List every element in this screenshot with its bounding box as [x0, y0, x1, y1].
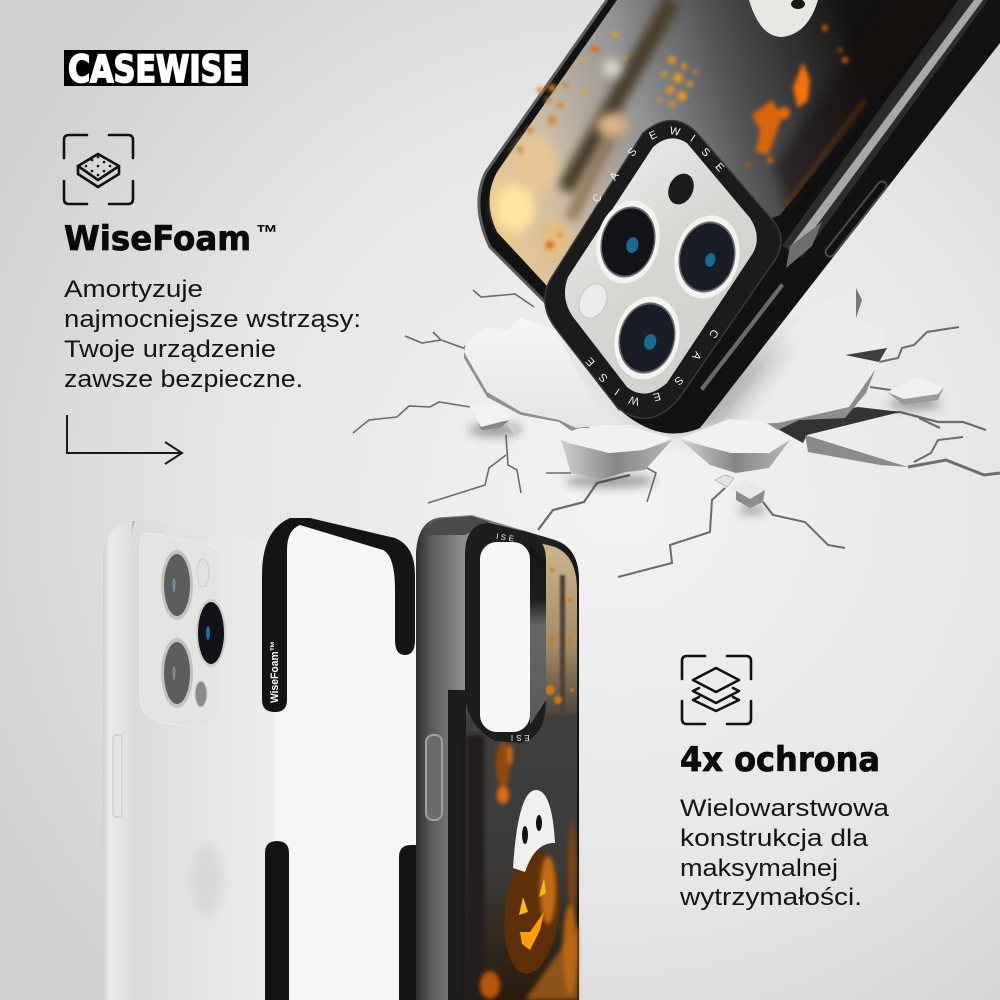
- chunk shadows: [469, 399, 941, 514]
- ghost eye: [791, 0, 805, 9]
- ring lettering: S: [672, 374, 685, 387]
- ring text: I: [511, 733, 513, 742]
- top phone with case: [479, 0, 1000, 434]
- heading: WiseFoam: WiseFoam: [64, 219, 251, 259]
- apple logo ghost: [192, 844, 222, 916]
- case artwork: [490, 0, 955, 300]
- side button inner: [830, 186, 882, 252]
- ring lettering: S: [626, 146, 640, 159]
- cracked ground: [353, 288, 1000, 577]
- clear back plate: [275, 525, 418, 1000]
- phone back body: [103, 521, 275, 1000]
- ring lettering: W: [668, 125, 682, 139]
- ring text: E: [524, 733, 530, 742]
- left slab: [464, 318, 605, 434]
- ring lettering: C: [591, 192, 605, 205]
- pumpkin mouth: [520, 912, 544, 950]
- black case side view: [416, 515, 579, 1000]
- ring text: [496, 532, 530, 742]
- orange embers: [517, 25, 865, 249]
- heading: 4x ochrona: 4x ochrona: [680, 740, 880, 780]
- text block: 4x description: maksymalnej: [680, 855, 838, 882]
- side strip: [782, 0, 988, 258]
- camera ring: [545, 120, 781, 418]
- ring text: E: [508, 534, 515, 543]
- crater floor: [520, 300, 860, 425]
- clear case rim: [479, 0, 620, 410]
- foam lower right: [399, 845, 417, 1000]
- lens top: [588, 194, 668, 290]
- ring lettering: I: [688, 133, 697, 144]
- pumpkin eyes: [519, 897, 528, 915]
- camera cutout ring: [465, 523, 546, 743]
- lens three: [161, 638, 193, 708]
- ring lettering: E: [652, 389, 662, 403]
- text block: WiseFoam description: Twoje urządzenie: [64, 336, 276, 363]
- dark lower flank: [448, 690, 466, 1000]
- ring lettering: [584, 125, 726, 407]
- tree trunks: [565, 0, 673, 190]
- dark fissure: [765, 407, 900, 443]
- ring lettering: E: [712, 161, 726, 174]
- dark trunk lower: [570, 120, 620, 220]
- lens bottom: [606, 290, 688, 386]
- icon: layers in viewfinder: [682, 656, 751, 724]
- ring lettering: A: [689, 349, 703, 362]
- arrow: [67, 415, 182, 464]
- road light: [525, 925, 578, 1000]
- ring lettering: E: [584, 355, 598, 368]
- side button: [830, 186, 882, 252]
- right lower wedge: [805, 435, 908, 467]
- foam label: WiseFoam™: [269, 641, 281, 703]
- ring lettering: A: [608, 170, 622, 183]
- right stone: [887, 377, 944, 405]
- white phone back view: [103, 521, 275, 1000]
- text block: 4x description: [679, 795, 889, 911]
- hairline cracks: [353, 290, 1000, 577]
- ring inner bevel: [530, 545, 546, 725]
- text block: 4x description: wytrzymałości.: [679, 884, 862, 911]
- lens two: [196, 599, 226, 667]
- side button: [426, 735, 442, 820]
- chunk: centre left: [559, 428, 672, 479]
- side strip wedge: [786, 222, 822, 268]
- camera plateau: [565, 138, 757, 394]
- lidar dot: [663, 169, 699, 209]
- dark forest right: [775, 0, 955, 215]
- lower gloss strip: [700, 283, 784, 391]
- art top panel: [540, 543, 577, 715]
- icon: foam in viewfinder: [64, 135, 133, 204]
- phone impact shadow: [590, 340, 790, 430]
- ring text: I: [496, 532, 499, 541]
- dark left forest: [466, 735, 484, 1000]
- autumn glow left: [495, 59, 628, 258]
- text block: 4x description: Wielowarstwowa: [680, 795, 889, 822]
- embers: [480, 741, 577, 999]
- foam upper band: [262, 518, 415, 712]
- camera hole: [480, 542, 530, 732]
- chunks below: [715, 475, 765, 508]
- foam lower left: [265, 841, 289, 1000]
- side button: [113, 735, 122, 817]
- chunk: left small: [470, 402, 523, 436]
- side strip highlight: [790, 0, 983, 252]
- heading: WiseFoam: ™: [256, 220, 278, 245]
- ring text: S: [500, 533, 507, 542]
- lens one: [161, 550, 193, 620]
- logo: CASEWISE: [68, 48, 243, 91]
- text block: 4x description: konstrukcja dla: [680, 825, 868, 852]
- right slab: [720, 288, 887, 430]
- ring lettering: W: [627, 393, 641, 407]
- ring text: S: [516, 733, 522, 742]
- text block: WiseFoam description: Amortyzuje: [64, 276, 203, 303]
- sensor: [195, 681, 207, 707]
- phone side band: [103, 521, 135, 1000]
- lens right: [666, 209, 748, 305]
- text block: WiseFoam description: [64, 276, 361, 393]
- ring lettering: S: [699, 146, 712, 159]
- ring lettering: I: [613, 386, 622, 397]
- top panel embers: [545, 568, 574, 704]
- ring lettering: E: [647, 129, 659, 143]
- camera plateau: [140, 533, 221, 728]
- flash: [197, 559, 209, 587]
- artwork: [466, 700, 577, 1000]
- case body: [479, 0, 1000, 434]
- ghost head: [749, 0, 818, 37]
- trunk: [560, 575, 565, 715]
- text block: WiseFoam description: najmocniejsze wstrząsy:: [64, 306, 361, 333]
- ghost eye two: [536, 815, 542, 831]
- flash: [574, 279, 612, 323]
- ghost: [513, 790, 555, 872]
- ring lettering: C: [706, 327, 720, 340]
- top edge shade: [425, 516, 490, 535]
- chunk: centre right: [681, 419, 790, 473]
- text block: WiseFoam description: zawsze bezpieczne.: [64, 366, 303, 393]
- pumpkin: [499, 848, 565, 976]
- ghost eyes: [522, 826, 528, 844]
- case strip: [416, 515, 579, 1000]
- ring lettering: S: [597, 371, 610, 384]
- WiseFoam foam liner: [262, 518, 417, 1000]
